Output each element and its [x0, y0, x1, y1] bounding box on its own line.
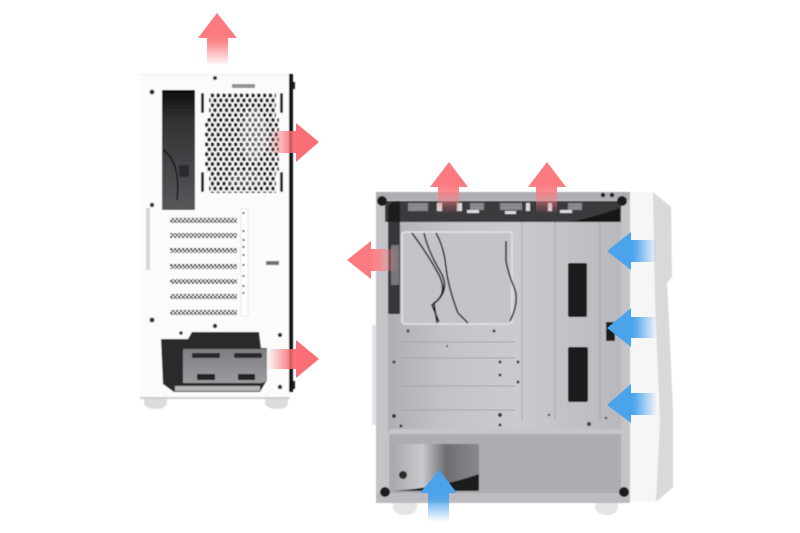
screw holes: [392, 330, 607, 428]
rear screws: [150, 76, 282, 389]
side view case: [372, 192, 673, 515]
psu opening: [161, 332, 267, 392]
blue arrow: bottom intake: [420, 470, 457, 522]
red arrow: rear fan exhaust: [268, 123, 319, 162]
tray lines: [400, 222, 600, 420]
side feet: [393, 502, 618, 515]
red arrow: side exhaust: [347, 241, 399, 279]
fan mesh: [205, 93, 279, 193]
red arrow: rear top exhaust: [198, 13, 237, 66]
thumb latch: [266, 261, 279, 265]
side rail: [146, 208, 150, 270]
front bezel: [630, 192, 673, 502]
mesh clips: [201, 93, 283, 192]
bottom vent: [175, 386, 260, 391]
rear edge strip: [289, 74, 293, 392]
psu intake opening: [392, 444, 479, 491]
blue arrow: front intake lower: [607, 384, 657, 423]
red arrow: top exhaust two: [528, 162, 566, 214]
inner tray: [388, 215, 621, 433]
rear body panel: [140, 74, 290, 399]
psu shroud: [389, 429, 621, 493]
cables: [412, 233, 516, 323]
blue arrow: front intake top: [607, 232, 657, 270]
psu plate: [183, 349, 267, 383]
rear fan: [388, 222, 400, 314]
slot bracket: [241, 209, 248, 316]
bottom rail: [376, 493, 630, 503]
expansion slots: [170, 218, 237, 315]
right tray cutouts: [568, 263, 615, 402]
chassis frame: [376, 192, 630, 503]
top fan band: [376, 192, 630, 222]
rear view case: [140, 74, 295, 409]
motherboard cutout: [402, 232, 516, 324]
side window opening: [162, 90, 195, 210]
red arrow: top exhaust one: [430, 162, 468, 214]
rear io tabs: [372, 325, 377, 425]
corner bolts: [377, 193, 629, 497]
red arrow: rear psu exhaust: [267, 340, 319, 378]
top label: [232, 84, 255, 88]
blue arrow: front intake middle: [607, 308, 657, 347]
rear feet: [144, 398, 288, 409]
